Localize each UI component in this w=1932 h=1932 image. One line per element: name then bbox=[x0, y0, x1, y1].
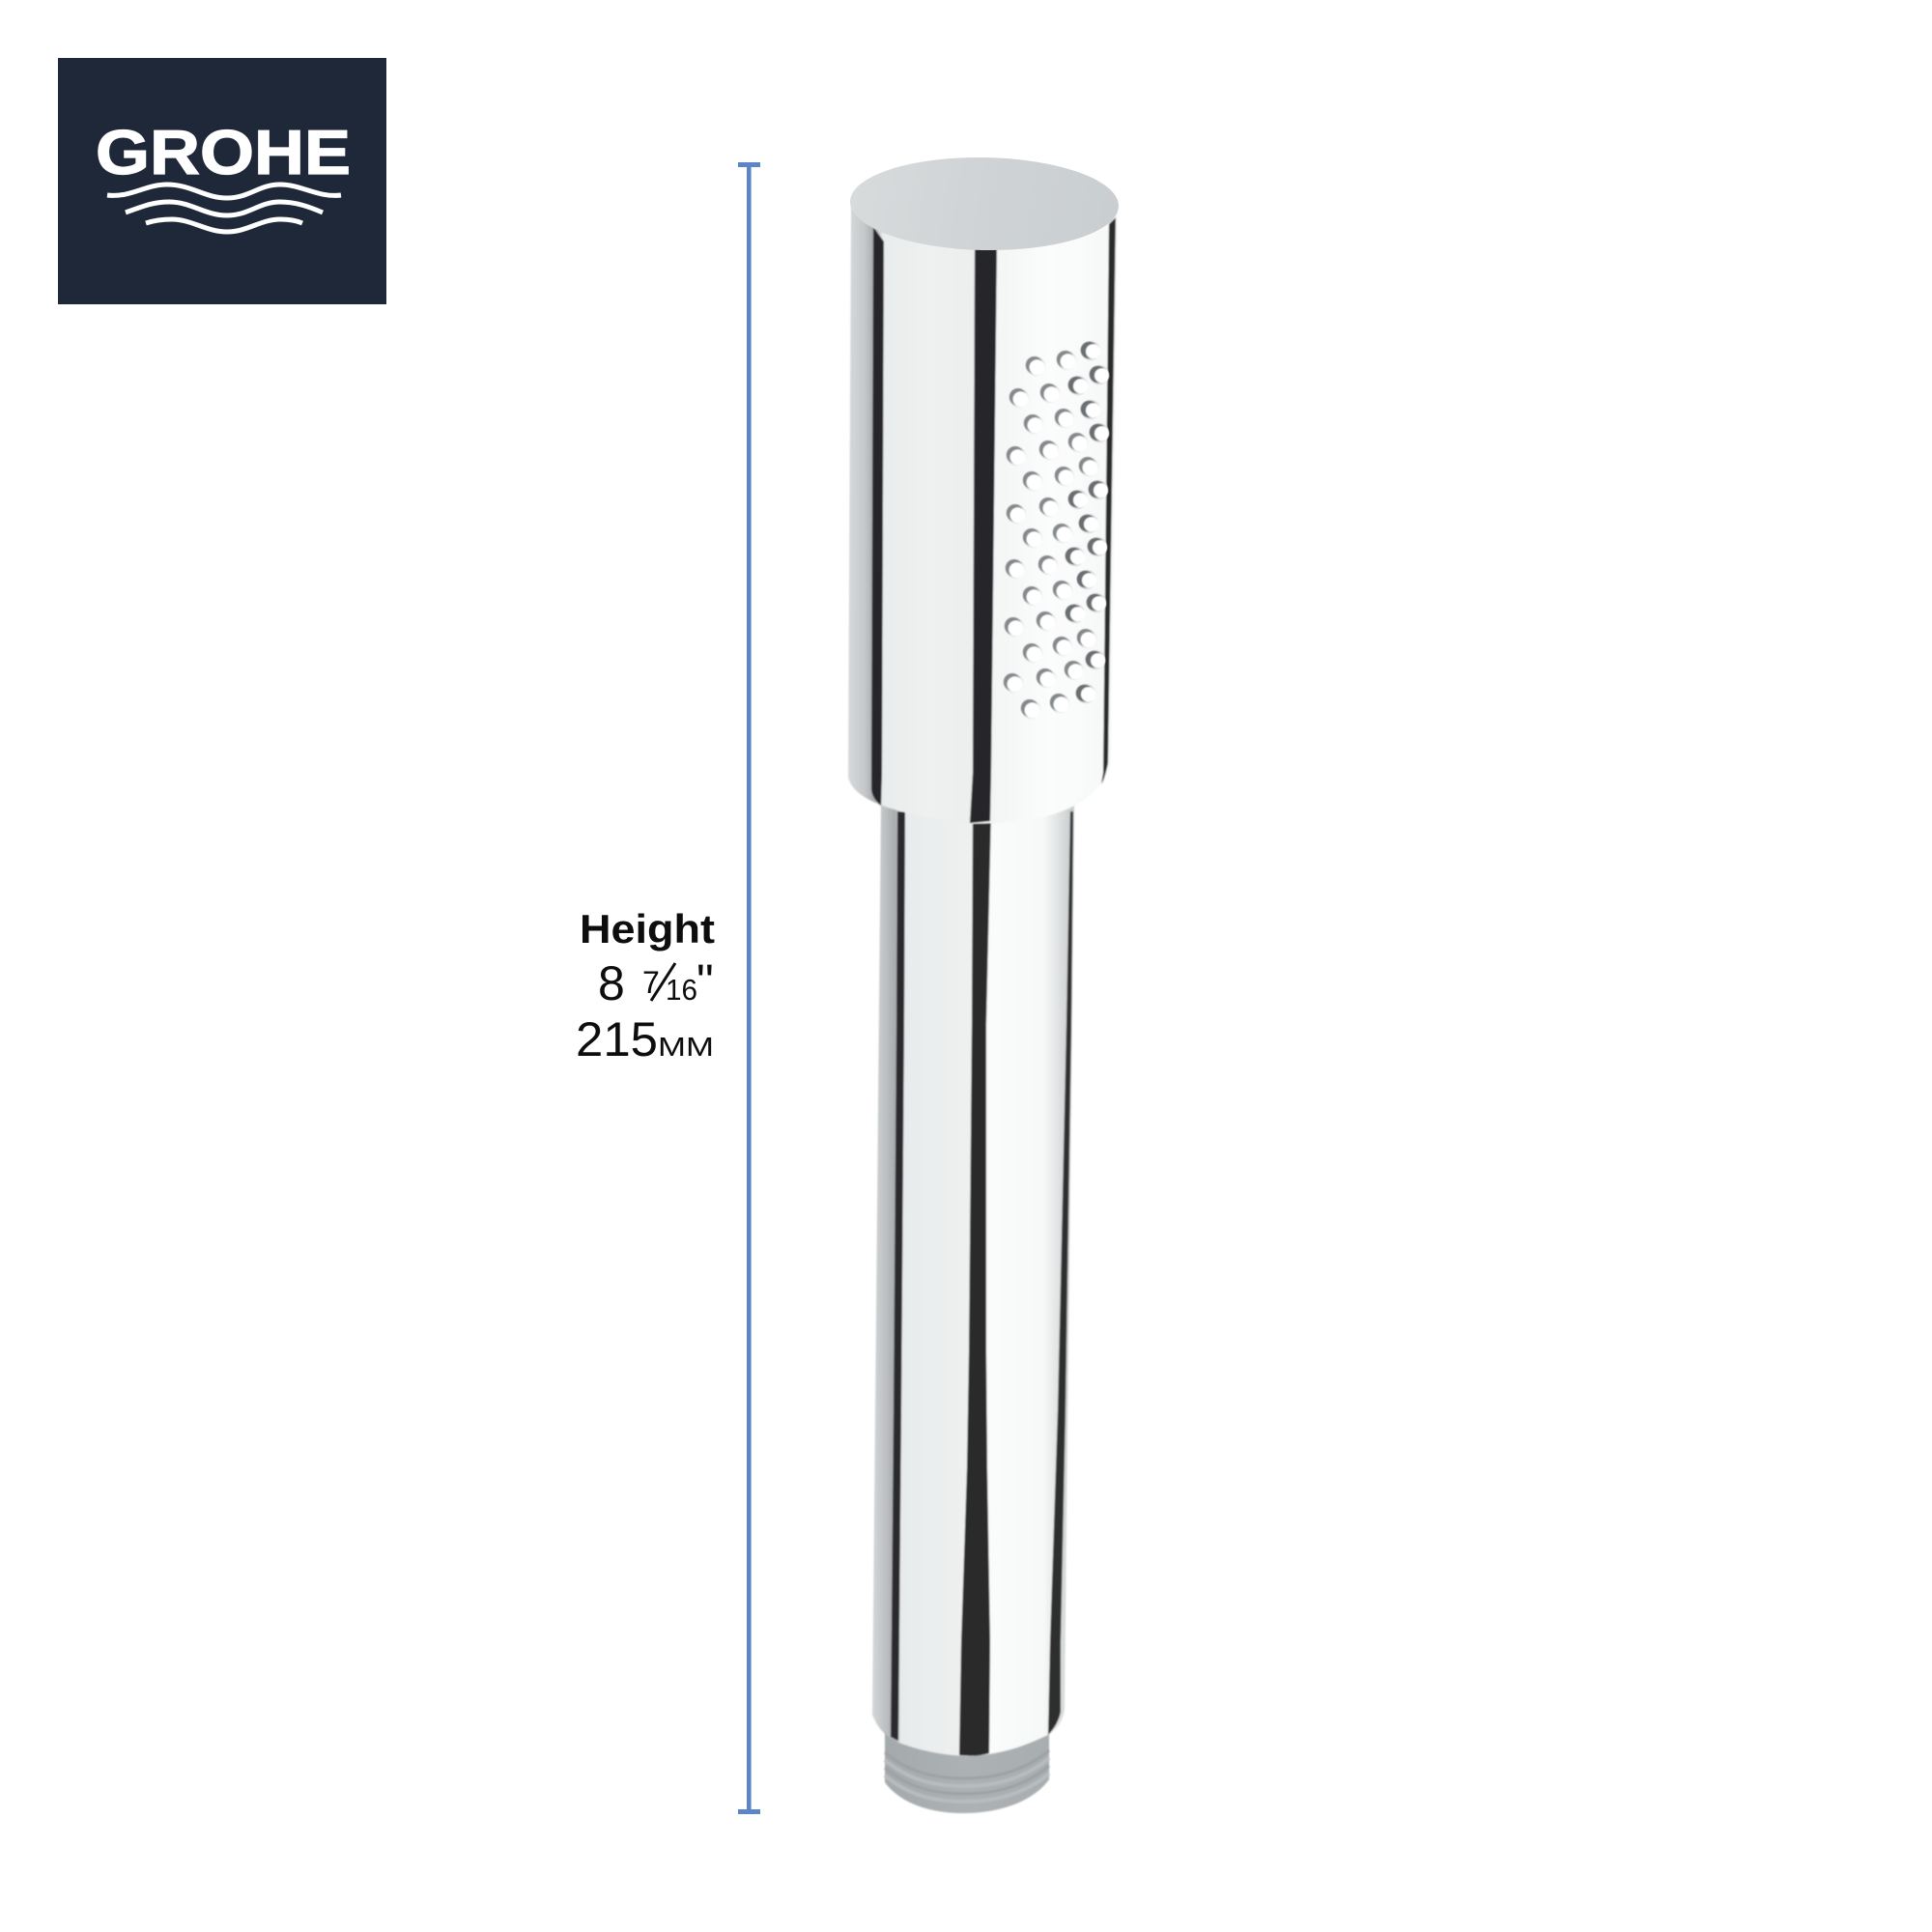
shower head body bbox=[848, 205, 1118, 824]
GROHE logo bbox=[58, 58, 386, 304]
inches measurement: " bbox=[696, 954, 714, 1009]
label heading: Height bbox=[580, 906, 715, 952]
millimetre measurement: MM bbox=[658, 1032, 714, 1062]
inches measurement bbox=[598, 954, 714, 1010]
height label bbox=[576, 906, 715, 1066]
logo waves bbox=[107, 185, 341, 232]
product: hand shower bbox=[848, 156, 1120, 1813]
height dimension line bbox=[738, 162, 760, 1814]
inches measurement: 8 bbox=[598, 956, 625, 1010]
head top face bbox=[849, 156, 1120, 252]
millimetre measurement: 215 bbox=[576, 1012, 658, 1066]
spray nozzles bbox=[1004, 341, 1109, 719]
logo wordmark: GROHE bbox=[96, 117, 351, 187]
inches measurement: 7 bbox=[642, 965, 660, 1000]
threaded connector bbox=[885, 1729, 1049, 1813]
millimetre measurement bbox=[576, 1012, 714, 1066]
inches measurement: 16 bbox=[666, 973, 697, 1007]
shower stem bbox=[872, 802, 1074, 1756]
